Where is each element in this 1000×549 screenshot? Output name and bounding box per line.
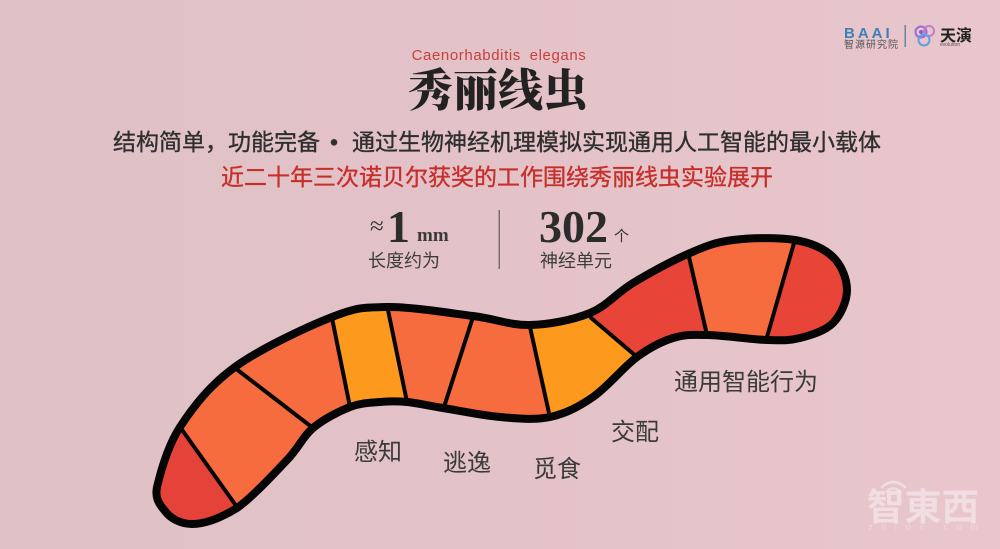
label: mating: 交配 (611, 419, 659, 446)
stat: neurons: 个 (614, 228, 629, 245)
watermark: 智東西 (867, 487, 979, 528)
stat: neurons: 神经单元 (540, 251, 612, 271)
stat: length: 1 (387, 201, 410, 252)
icon: orbit circles (916, 26, 934, 46)
label: sensing: 感知 (354, 439, 402, 466)
subtitle: 结构简单，功能完备 (113, 129, 320, 155)
stat: neurons: 302 (539, 201, 608, 252)
subtitle: 通过生物神经机理模拟实现通用人工智能的最小载体 (352, 129, 881, 155)
watermark: zhidx.com (868, 522, 978, 532)
logo: BAAI: 智源研究院 (844, 38, 899, 51)
logo: BAAI (844, 25, 899, 51)
logo: Tianyan: evolution (940, 42, 960, 48)
worm outline (156, 238, 847, 524)
logo: Tianyan: 天演 (940, 26, 972, 45)
logo: Tianyan (916, 26, 972, 48)
label: general intelligent behaviour: 通用智能行为 (674, 369, 818, 396)
label: escape: 逃逸 (443, 450, 491, 477)
stat divider (498, 210, 500, 269)
title: 秀丽线虫 (408, 66, 591, 116)
logo: BAAI: BAAI (844, 25, 893, 42)
label: foraging: 觅食 (533, 456, 581, 483)
stat: length (368, 201, 449, 271)
logo divider (904, 25, 906, 47)
stat: length: ≈ (370, 213, 384, 240)
segment dividers (180, 243, 794, 507)
worm segments (160, 242, 843, 520)
subtitle: • (330, 129, 338, 155)
red highlight line: 近二十年三次诺贝尔获奖的工作围绕秀丽线虫实验展开 (221, 164, 773, 190)
latin name: Caenorhabditis elegans (412, 47, 586, 64)
stat: neurons (539, 201, 629, 271)
worm diagram (152, 234, 851, 528)
stat: length: mm (417, 225, 449, 246)
stat: length: 长度约为 (368, 251, 440, 271)
